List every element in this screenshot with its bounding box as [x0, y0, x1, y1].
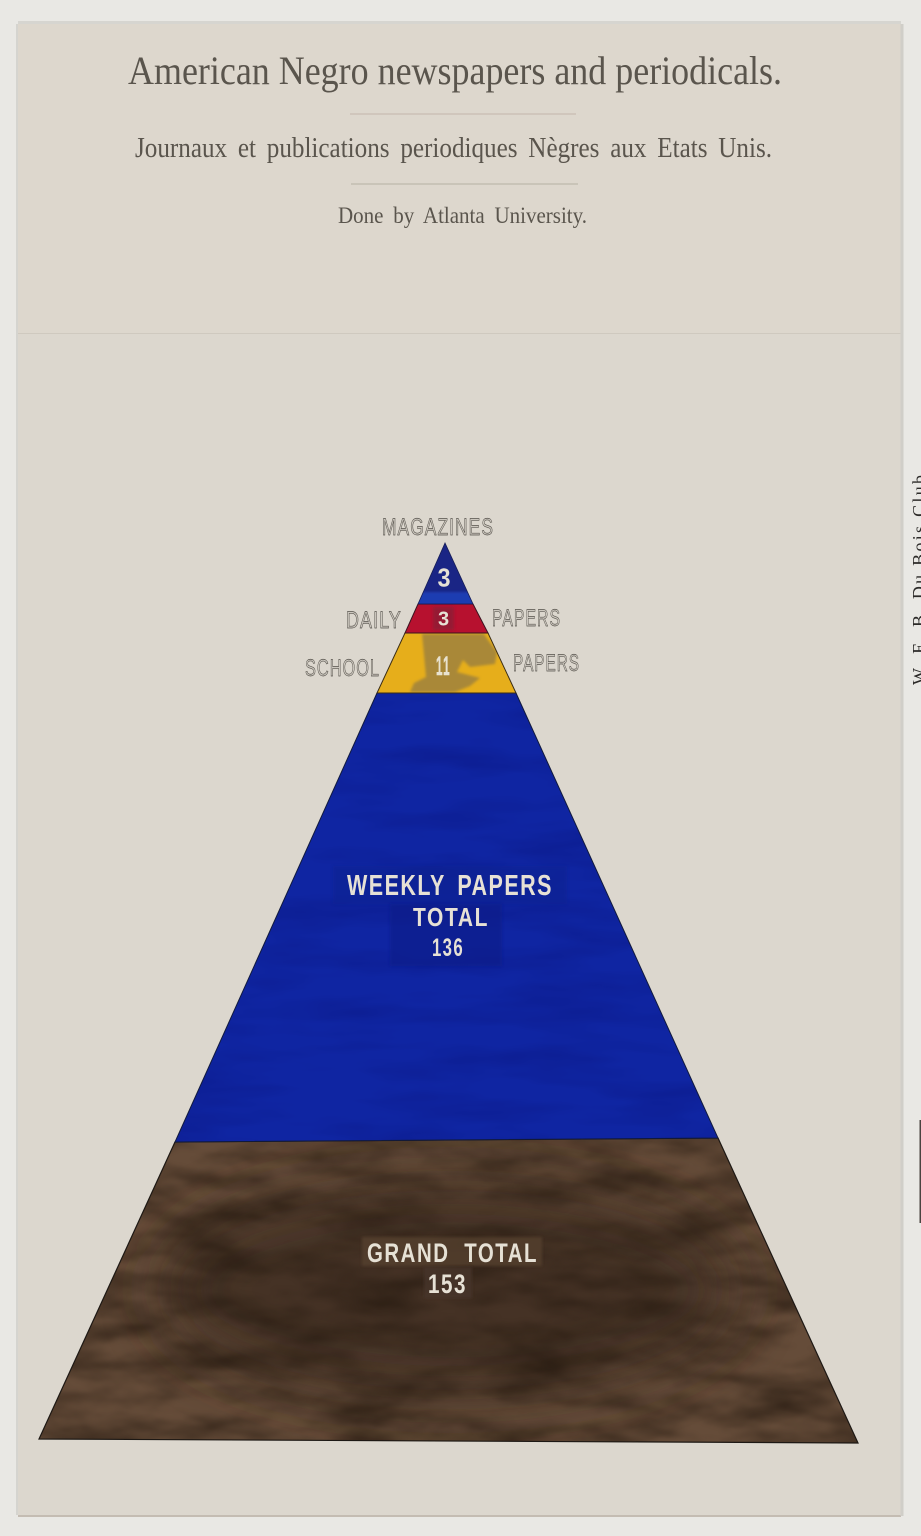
pyramid chart — [30, 543, 870, 1450]
label: school: SCHOOL — [305, 655, 380, 682]
band: daily papers 3 — [405, 604, 488, 633]
label: papers (daily): PAPERS — [492, 605, 561, 632]
erased patch behind label — [362, 1237, 542, 1266]
value: 153: 153 — [428, 1269, 467, 1299]
value: 3: 3 — [438, 608, 449, 630]
band: weekly papers 136 — [170, 690, 725, 1145]
title: American Negro newspapers and periodicals. — [128, 48, 782, 93]
label: total: TOTAL — [413, 902, 489, 932]
band: grand total 153 — [30, 1130, 870, 1450]
band: magazines 3 — [415, 543, 475, 605]
edge strip — [920, 1120, 921, 1223]
credit line: Done by Atlanta University. — [338, 203, 587, 228]
label: weekly papers: WEEKLY PAPERS — [347, 870, 553, 902]
label: magazines: MAGAZINES — [382, 514, 494, 541]
French subtitle: Journaux et publications periodiques Nègres aux Etats Unis. — [135, 133, 772, 164]
label: daily: DAILY — [346, 607, 402, 634]
label: grand total: GRAND TOTAL — [367, 1238, 538, 1268]
value: 136: 136 — [432, 934, 464, 962]
band: school papers 11 — [377, 633, 516, 693]
erased patch behind label — [333, 866, 567, 904]
label: papers (school): PAPERS — [513, 650, 580, 677]
water stain — [410, 634, 497, 692]
upper title panel — [18, 24, 901, 333]
band: school papers 11: 11 — [436, 651, 451, 681]
value: 3: 3 — [438, 562, 450, 592]
